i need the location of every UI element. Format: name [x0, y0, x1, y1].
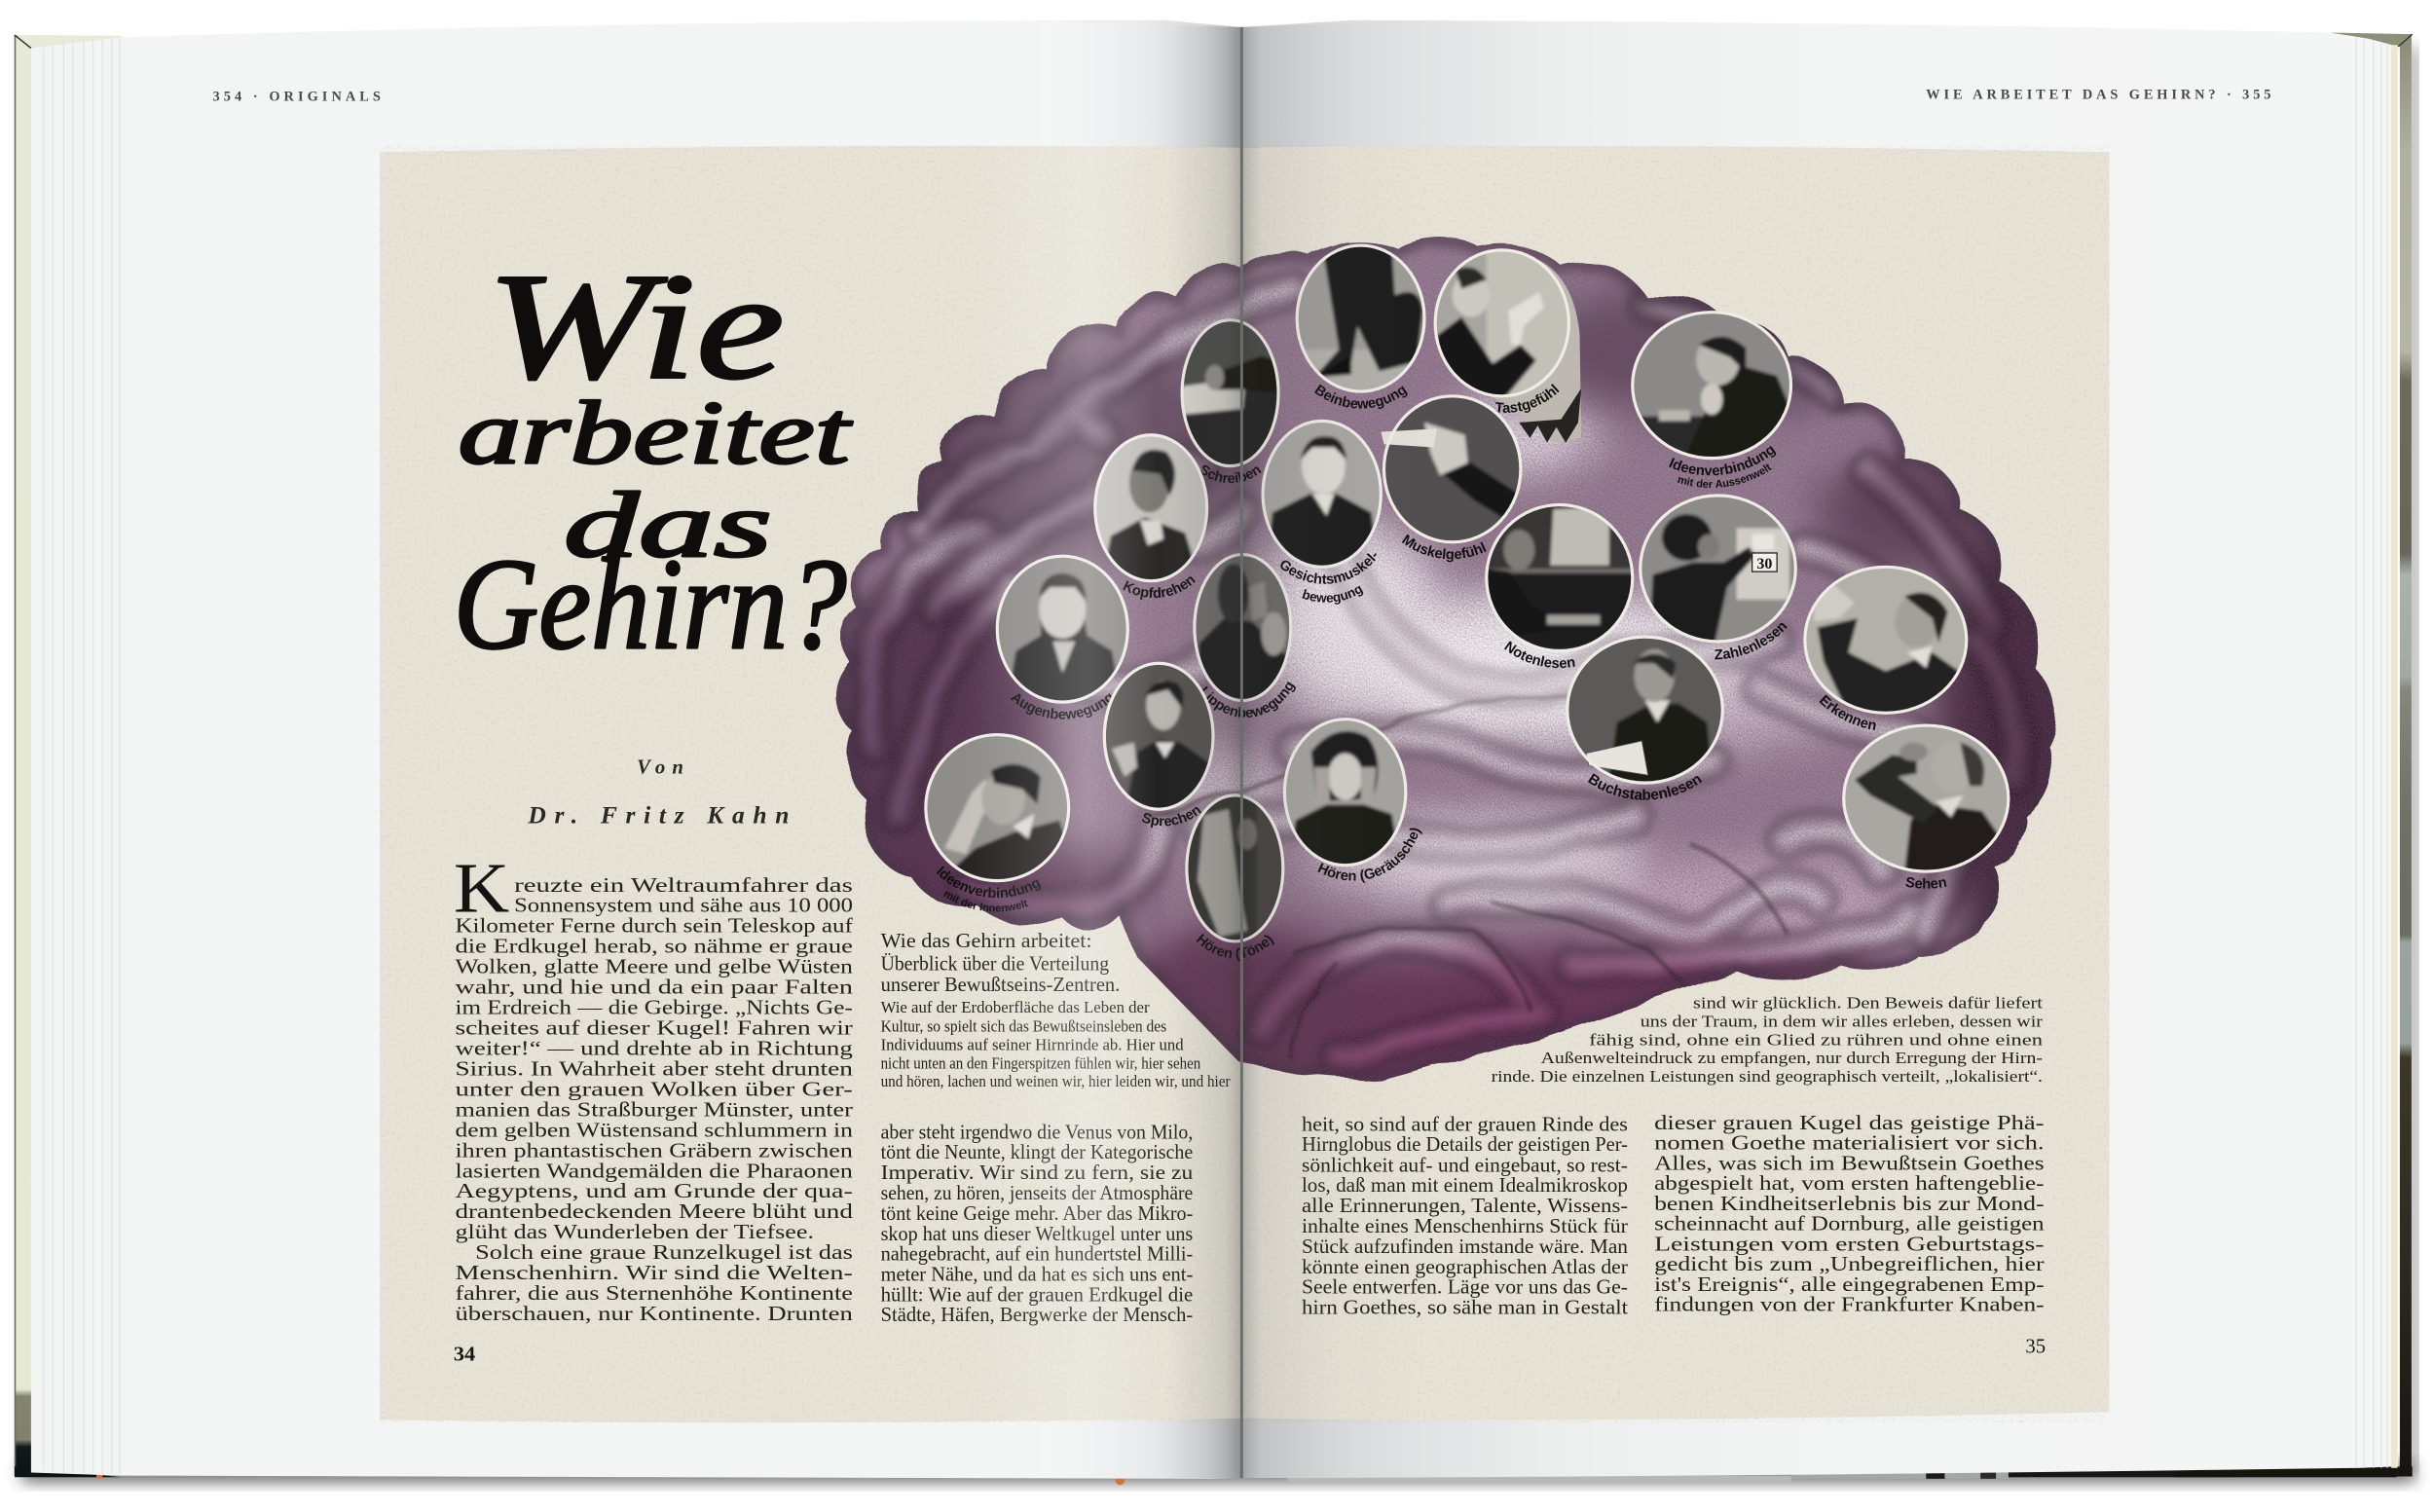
text column 3: [1302, 1114, 1629, 1319]
title: Wie: [486, 242, 785, 411]
brain caption left: Individuums auf seiner Hirnrinde ab. Hier und: [881, 1036, 1184, 1054]
photo: Sprechen: Sprechen: [1137, 801, 1206, 834]
title: Gehirn?: [454, 532, 846, 676]
text column 2: tönt die Neunte, klingt der Kategorische: [881, 1142, 1193, 1163]
panel: left page: [31, 20, 1241, 1479]
text column 4: Leistungen vom ersten Geburtstags-: [1654, 1234, 2045, 1255]
photo: Sehen: Sehen: [1904, 875, 1948, 893]
photo: Ideenverbindung mit der Innenwelt: [924, 733, 1072, 921]
text column 2: Imperativ. Wir sind zu fern, sie zu: [881, 1162, 1194, 1184]
text column 1: glüht das Wunderleben der Tiefsee.: [455, 1222, 814, 1243]
text column 4: ist's Ereignis“, alle eingegrabenen Emp-: [1654, 1274, 2045, 1296]
text column 1: ihren phantastischen Gräbern zwischen: [455, 1140, 854, 1162]
text column 1: Sirius. In Wahrheit aber steht drunten: [455, 1059, 854, 1081]
text column 1: Kilometer Ferne durch sein Teleskop auf: [455, 916, 853, 938]
text column 4: nomen Goethe materialisiert vor sich.: [1654, 1133, 2045, 1155]
photo: Ideenverbindung mit der Aussenwelt: Ideenverbindung: [1669, 446, 1776, 475]
text column 2: aber steht irgendwo die Venus von Milo,: [881, 1122, 1193, 1143]
text column 2: meter Nähe, und da hat es sich uns ent-: [881, 1265, 1193, 1286]
illustration: brain: [835, 237, 2056, 1083]
text column 3: könnte einen geographischen Atlas der: [1302, 1257, 1628, 1278]
page number 34: 34: [454, 1343, 475, 1366]
photo: Erkennen: Erkennen: [1814, 691, 1882, 739]
brain caption left: nicht unten an den Fingerspitzen fühlen wir, hier sehen: [881, 1054, 1201, 1073]
photo: Schreiben: [1180, 318, 1280, 483]
text column 4: dieser grauen Kugel das geistige Phä-: [1654, 1113, 2045, 1134]
arch backdrop: Tastgefühl curtain: [1437, 251, 1581, 443]
photo: Ideenverbindung mit der Aussenwelt: mit der Aussenwelt: [1678, 463, 1772, 488]
photo: Muskelgefühl: [1381, 394, 1523, 563]
text column 1: überschauen, nur Kontinente. Drunten: [455, 1304, 854, 1325]
gutter shading left: [963, 20, 1241, 1478]
page edge stack left: [44, 37, 120, 1476]
panel: reproduced magazine spread: [380, 146, 2110, 1423]
title: das: [564, 473, 772, 576]
brain caption right: sind wir glücklich. Den Beweis dafür liefert: [1693, 993, 2043, 1012]
photo: Tastgefühl: [1433, 248, 1570, 413]
text column 1: fahrer, die aus Sternenhöhe Kontinente: [455, 1283, 853, 1305]
text column 1: drantenbedeckenden Meere blüht und: [455, 1201, 854, 1223]
brain caption left: Wie auf der Erdoberfläche das Leben der: [881, 998, 1150, 1016]
title: [454, 242, 853, 676]
text column 1: manien das Straßburger Münster, unter: [455, 1099, 853, 1121]
brain caption left: Wie das Gehirn arbeitet:: [881, 929, 1092, 952]
text column 1: scheites auf dieser Kugel! Fahren wir: [455, 1018, 853, 1040]
text column 4: findungen von der Frankfurter Knaben-: [1654, 1295, 2045, 1316]
photo: Zahlenlesen: 30: [1756, 556, 1772, 572]
brain caption right: [1492, 993, 2044, 1086]
text column 1: wahr, und hie und da ein paar Falten: [455, 977, 854, 999]
photo: Erkennen: [1803, 565, 1969, 730]
photo: Augenbewegung: [995, 555, 1129, 719]
photo: Ideenverbindung mit der Innenwelt: Ideenverbindung: [931, 863, 1045, 908]
text column 2: [881, 1122, 1194, 1326]
text column 2: nahegebracht, auf ein hundertstel Milli-: [881, 1244, 1193, 1266]
text column 1: weiter!“ — und drehte ab in Richtung: [455, 1038, 853, 1059]
text column 4: [1654, 1113, 2045, 1316]
running head left: 354 · ORIGINALS: [213, 90, 381, 105]
running head right: WIE ARBEITET DAS GEHIRN? · 355: [1926, 87, 2270, 102]
text column 3: sönlichkeit auf- und eingebaut, so rest-: [1302, 1155, 1628, 1176]
text column 1: im Erdreich — die Gebirge. „Nichts Ge-: [455, 998, 853, 1019]
photo: Gesichtsmuskelbewegung: bewegung: [1302, 586, 1363, 605]
text column 3: los, daß man mit einem Idealmikroskop: [1302, 1175, 1628, 1197]
byline: Dr. Fritz Kahn: [527, 801, 789, 830]
text column 2: tönt keine Geige mehr. Aber das Mikro-: [881, 1203, 1193, 1225]
photo: Hören (Töne): [1185, 793, 1284, 962]
book spine: [1240, 27, 1243, 1478]
text column 4: gedicht bis zum „Unbegreiflichen, hier: [1654, 1254, 2045, 1275]
photo: Lippenbewegung: [1193, 553, 1296, 718]
brain caption left: [881, 929, 1231, 1090]
text column 2: hüllt: Wie auf der grauen Erdkugel die: [881, 1284, 1193, 1306]
photo: Zahlenlesen: [1639, 494, 1797, 660]
text column 1: reuzte ein Weltraumfahrer das: [514, 875, 853, 897]
photo: Gesichtsmuskelbewegung: Gesichtsmuskel-: [1280, 553, 1377, 584]
photo: Kopfdrehen: Kopfdrehen: [1123, 576, 1196, 600]
text column 1: [454, 849, 854, 1325]
photo: Zahlenlesen: Zahlenlesen: [1709, 616, 1794, 671]
photo: Hören (Geräusche): Hören (Geräusche): [1311, 821, 1435, 902]
brain caption right: Außenwelteindruck zu empfangen, nur durch Erregung der Hirn-: [1541, 1049, 2043, 1067]
photo: Ideenverbindung mit der Aussenwelt: [1631, 311, 1793, 488]
panel: right page: [1241, 20, 2398, 1478]
text column 4: benen Kindheitserlebnis bis zur Mond-: [1654, 1194, 2045, 1215]
text column 2: Städte, Häfen, Bergwerke der Mensch-: [881, 1305, 1193, 1326]
photo: Kopfdrehen: [1093, 433, 1209, 600]
text column 1: K: [454, 849, 509, 928]
text column 4: abgespielt hat, vom ersten haftengeblie-: [1654, 1173, 2045, 1195]
page number 35: 35: [2025, 1337, 2046, 1358]
photo: Lippenbewegung: Lippenbewegung: [1196, 678, 1301, 725]
photo: Augenbewegung: Augenbewegung: [1008, 689, 1118, 723]
brain caption right: rinde. Die einzelnen Leistungen sind geographisch verteilt, „lokalisiert“.: [1492, 1067, 2043, 1086]
photo: Buchstabenlesen: Buchstabenlesen: [1585, 771, 1705, 804]
brain caption left: und hören, lachen und weinen wir, hier leiden wir, und hier: [881, 1072, 1231, 1090]
text column 1: Sonnensystem und sähe aus 10 000: [514, 896, 853, 917]
brain caption left: Überblick über die Verteilung: [881, 951, 1109, 975]
text column 3: hirn Goethes, so sähe man in Gestalt: [1302, 1298, 1628, 1319]
photo: Beinbewegung: Beinbewegung: [1314, 384, 1408, 409]
photo: Muskelgefühl: Muskelgefühl: [1402, 534, 1487, 563]
gutter shading right: [1241, 20, 1429, 1478]
photo: Buchstabenlesen: [1566, 636, 1724, 804]
text column 1: Aegyptens, und am Grunde der qua-: [455, 1181, 853, 1202]
text column 4: Alles, was sich im Bewußtsein Goethes: [1654, 1153, 2045, 1174]
text column 3: Hirnglobus die Details der geistigen Per-: [1302, 1134, 1628, 1156]
text column 2: sehen, zu hören, jenseits der Atmosphäre: [881, 1183, 1193, 1204]
photo: Sehen: [1842, 723, 2010, 893]
text column 2: skop hat uns dieser Weltkugel unter uns: [881, 1224, 1193, 1245]
text column 3: Seele entwerfen. Läge vor uns das Ge-: [1302, 1277, 1628, 1299]
photo: Ideenverbindung mit der Innenwelt: mit der Innenwelt: [940, 888, 1031, 919]
text column 1: die Erdkugel herab, so nähme er graue: [455, 937, 853, 958]
text column 1: Menschenhirn. Wir sind die Welten-: [455, 1263, 853, 1284]
brain caption right: fähig sind, ohne ein Glied zu rühren und ohne einen: [1589, 1031, 2044, 1050]
byline: Von: [637, 757, 683, 779]
text column 1: unter den grauen Wolken über Ger-: [455, 1079, 853, 1100]
photo: Tastgefühl: Tastgefühl: [1495, 384, 1560, 413]
photo: Sprechen: [1103, 662, 1215, 834]
photo: Schreiben: Schreiben: [1200, 465, 1262, 483]
text column 3: inhalte eines Menschenhirns Stück für: [1302, 1216, 1628, 1237]
text column 1: Solch eine graue Runzelkugel ist das: [475, 1242, 853, 1264]
brain caption left: Kultur, so spielt sich das Bewußtseinsleben des: [881, 1016, 1166, 1035]
photo: Hören (Geräusche): [1283, 718, 1435, 902]
text column 1: dem gelben Wüstensand schlummern in: [455, 1120, 854, 1141]
brain caption left: unserer Bewußtseins-Zentren.: [881, 973, 1120, 996]
text column 3: Stück aufzufinden imstande wäre. Man: [1302, 1236, 1629, 1258]
text column 1: Wolken, glatte Meere und gelbe Wüsten: [455, 957, 854, 978]
photo: Notenlesen: Notenlesen: [1499, 638, 1580, 679]
title: arbeitet: [459, 384, 853, 483]
byline: [527, 757, 789, 830]
photo: Hören (Töne): Hören (Töne): [1193, 932, 1277, 962]
text column 1: lasierten Wandgemälden die Pharaonen: [455, 1161, 854, 1182]
photo: Notenlesen: [1485, 502, 1634, 668]
brain caption right: uns der Traum, in dem wir alles erleben, dessen wir: [1641, 1013, 2043, 1031]
text column 4: scheinnacht auf Dornburg, alle geistigen: [1654, 1214, 2045, 1235]
page edge stack right: [2356, 37, 2394, 1468]
photo: Gesichtsmuskelbewegung: [1262, 419, 1383, 605]
text column 3: heit, so sind auf der grauen Rinde des: [1302, 1114, 1628, 1135]
text column 3: alle Erinnerungen, Talente, Wissens-: [1302, 1196, 1628, 1217]
photo: Beinbewegung: [1295, 243, 1426, 409]
